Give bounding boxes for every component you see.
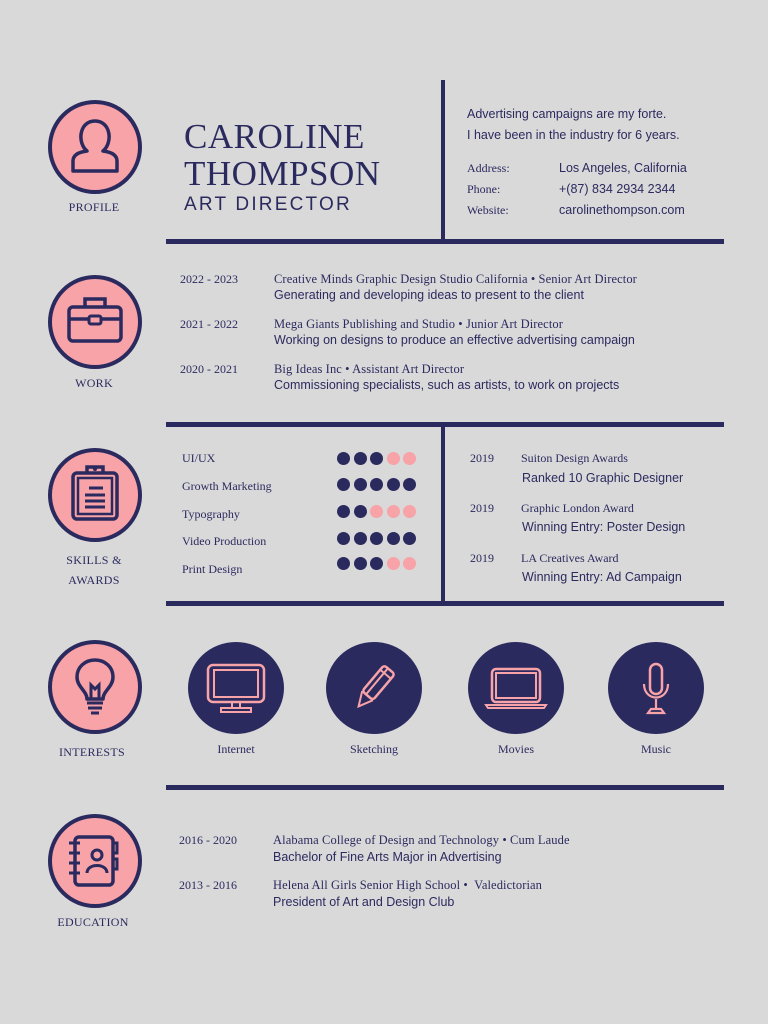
label: interests: INTERESTS (59, 745, 125, 759)
work experience: 2021 - 2022 (180, 317, 238, 331)
education list: Helena All Girls Senior High School • Valedictorian (273, 878, 542, 892)
icon: education (48, 814, 142, 908)
profile text: I have been in the industry for 6 years. (467, 128, 680, 142)
work experience: 2022 - 2023 (180, 272, 238, 286)
interest: movies: Movies (498, 742, 534, 756)
awards list: Winning Entry: Poster Design (522, 520, 685, 534)
label: work: WORK (75, 376, 113, 390)
work experience: Working on designs to produce an effective advertising campaign (274, 333, 635, 347)
label: profile: PROFILE (69, 200, 119, 214)
work experience: Creative Minds Graphic Design Studio California • Senior Art Director (274, 272, 637, 286)
icon: interests (48, 640, 142, 734)
interest: movies (468, 642, 564, 756)
interest: internet: Internet (217, 742, 255, 756)
contact details (467, 161, 687, 217)
interest: music: Music (641, 742, 671, 756)
interest: sketching: Sketching (350, 742, 398, 756)
awards list: 2019 (470, 451, 494, 465)
awards list: Ranked 10 Graphic Designer (522, 471, 683, 485)
label: skills & awards: AWARDS (68, 573, 120, 587)
contact details: carolinethompson.com (559, 203, 685, 217)
name title: CAROLINE (184, 117, 365, 156)
contact details: Address: (467, 161, 510, 175)
contact details: +(87) 834 2934 2344 (559, 182, 675, 196)
work experience: Mega Giants Publishing and Studio • Junior Art Director (274, 317, 563, 331)
subtitle: ART DIRECTOR (184, 194, 352, 215)
label: education: EDUCATION (57, 915, 129, 929)
name title (184, 117, 381, 193)
skills list (182, 451, 416, 576)
education list: 2016 - 2020 (179, 833, 237, 847)
skills list: Typography (182, 507, 240, 521)
education list: 2013 - 2016 (179, 878, 237, 892)
awards list: 2019 (470, 551, 494, 565)
profile text (467, 107, 680, 142)
contact details: Los Angeles, California (559, 161, 687, 175)
awards list: Suiton Design Awards (521, 451, 628, 465)
work experience: Commissioning specialists, such as artists, to work on projects (274, 378, 619, 392)
work experience (180, 272, 637, 392)
skills list: Print Design (182, 562, 242, 576)
contact details: Phone: (467, 182, 500, 196)
education list: President of Art and Design Club (273, 895, 454, 909)
profile text: Advertising campaigns are my forte. (467, 107, 666, 121)
icon: profile (48, 100, 142, 194)
education list: Bachelor of Fine Arts Major in Advertising (273, 850, 502, 864)
work experience: 2020 - 2021 (180, 362, 238, 376)
skills list: Video Production (182, 534, 266, 548)
awards list: Graphic London Award (521, 501, 634, 515)
skills list: UI/UX (182, 451, 215, 465)
name title: THOMPSON (184, 154, 381, 193)
education list (179, 833, 570, 909)
awards list (470, 451, 685, 584)
work experience: Big Ideas Inc • Assistant Art Director (274, 362, 464, 376)
skills list: Growth Marketing (182, 479, 272, 493)
label: skills & awards: SKILLS & (66, 553, 122, 567)
awards list: 2019 (470, 501, 494, 515)
work experience: Generating and developing ideas to present to the client (274, 288, 584, 302)
interest: sketching (326, 642, 422, 756)
icon: work (48, 275, 142, 369)
label: skills & awards (66, 553, 122, 587)
icon: skills (48, 448, 142, 542)
contact details: Website: (467, 203, 509, 217)
awards list: Winning Entry: Ad Campaign (522, 570, 682, 584)
education list: Alabama College of Design and Technology • Cum Laude (273, 833, 570, 847)
awards list: LA Creatives Award (521, 551, 619, 565)
interest: internet (188, 642, 284, 756)
interest: music (608, 642, 704, 756)
